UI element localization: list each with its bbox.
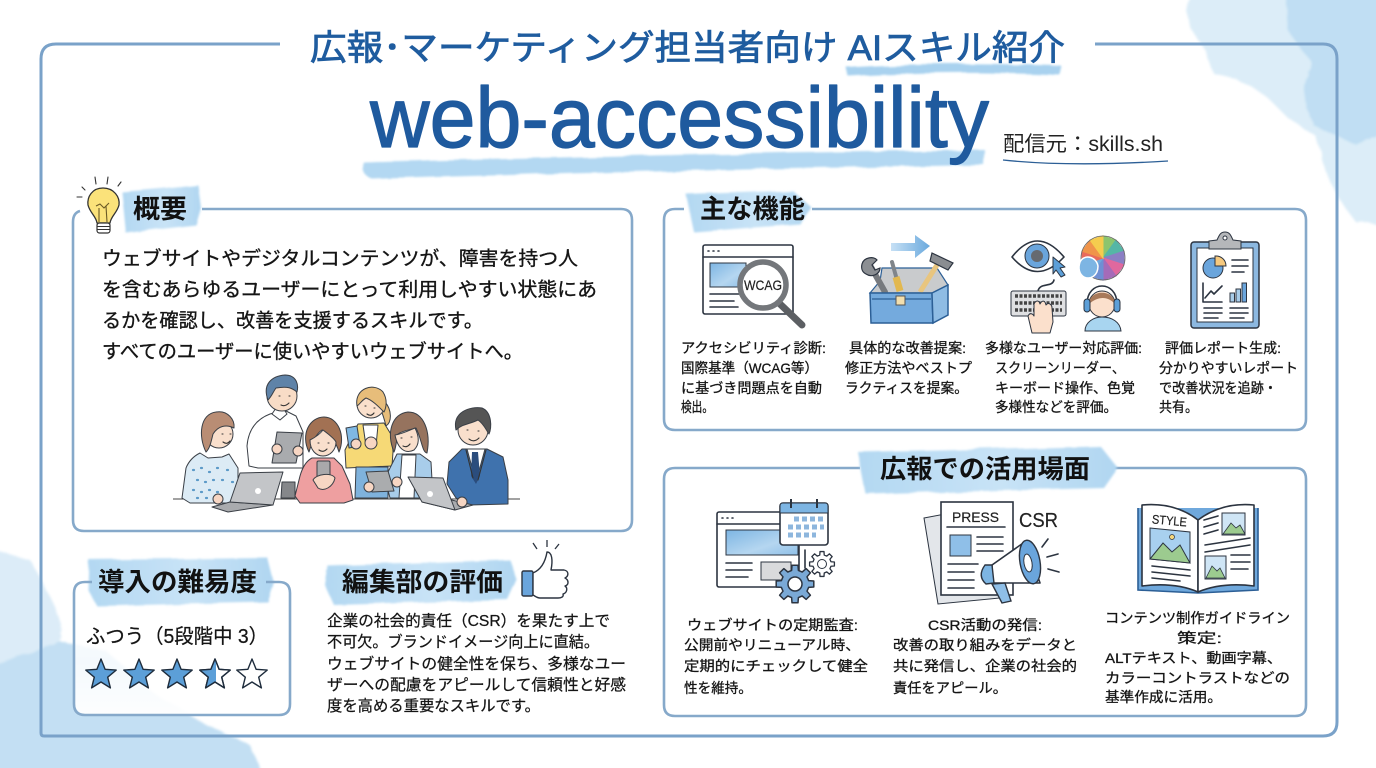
use case text: CSR communication: CSR活動の発信: — [928, 617, 1042, 633]
icon: website audit — [717, 499, 834, 603]
section: editorial review — [325, 540, 626, 715]
source label: 配信元：skills.sh — [1003, 133, 1163, 156]
icon: clipboard report — [1191, 232, 1259, 328]
eye — [1012, 241, 1064, 272]
title: subtitle — [310, 29, 1065, 76]
difficulty level: ふつう（5段階中 3） — [86, 625, 268, 648]
watercolor background: bottom left — [0, 548, 262, 768]
use case text: website audit: 定期的にチェックして健全 — [684, 658, 868, 674]
feature text: diverse user evaluation: 多様なユーザー対応評価: — [985, 340, 1142, 356]
icon: press release and megaphone: PRESS — [952, 509, 999, 525]
icon: style guide book — [1138, 505, 1258, 593]
feature text: diverse user evaluation: キーボード操作、色覚 — [995, 380, 1135, 396]
feature text: diverse user evaluation: スクリーンリーダー、 — [995, 360, 1125, 376]
review text: 企業の社会的責任（CSR）を果たす上で — [327, 612, 610, 630]
heading chip — [858, 446, 1118, 494]
feature text: report generation — [1159, 340, 1298, 415]
use case text: website audit — [684, 617, 868, 696]
review text: ウェブサイトの健全性を保ち、多様なユー — [327, 654, 626, 673]
heading chip — [122, 185, 201, 233]
use case text: content guidelines — [1105, 610, 1290, 705]
title: skill name — [363, 71, 989, 179]
heading: 概要 — [133, 194, 187, 224]
feature text: diverse user evaluation: 多様性などを評価。 — [995, 399, 1117, 415]
use case text: CSR communication: 改善の取り組みをデータと — [893, 637, 1077, 653]
icon: style guide book: STYLE — [1151, 512, 1187, 529]
heading: 主な機能 — [700, 194, 805, 224]
icon: toolbox — [862, 235, 953, 323]
overview text — [102, 247, 597, 363]
use case text: content guidelines: コンテンツ制作ガイドライン — [1105, 610, 1290, 626]
use case text: CSR communication — [893, 617, 1077, 696]
heading: 編集部の評価 — [342, 567, 503, 597]
icon: WCAG magnifier: WCAG — [744, 277, 782, 293]
overview text: ウェブサイトやデジタルコンテンツが、障害を持つ人 — [102, 247, 578, 270]
icon: press release and megaphone — [924, 502, 1059, 604]
feature text: accessibility diagnosis: 検出。 — [681, 399, 713, 415]
heading chip — [686, 190, 812, 232]
use case text: content guidelines: 策定: — [1177, 630, 1222, 646]
overview text: るかを確認し、改善を支援するスキルです。 — [102, 310, 483, 332]
review text: 不可欠。ブランドイメージ向上に直結。 — [327, 632, 599, 651]
use case text: CSR communication: 共に発信し、企業の社会的 — [893, 658, 1077, 674]
heading: 導入の難易度 — [98, 567, 257, 597]
feature text: report generation: 評価レポート生成: — [1165, 340, 1281, 356]
skill name text: web-accessibility — [369, 71, 989, 166]
man standing — [247, 375, 303, 498]
feature text: accessibility diagnosis: に基づき問題点を自動 — [681, 380, 822, 396]
watercolor background: top right — [1190, 0, 1376, 226]
use case text: content guidelines: カラーコントラストなどの — [1105, 670, 1290, 686]
woman in polka dot sweater — [182, 412, 238, 504]
laptop right — [408, 477, 473, 510]
icon: thumbs up — [522, 540, 568, 598]
review text — [327, 612, 626, 715]
woman in yellow — [345, 387, 393, 498]
icon: light bulb — [77, 177, 121, 233]
feature text: accessibility diagnosis — [681, 340, 826, 415]
heading: 広報での活用場面 — [880, 454, 1090, 484]
feature text: report generation: で改善状況を追跡・ — [1159, 380, 1277, 396]
use case text: content guidelines: 基準作成に活用。 — [1105, 689, 1222, 705]
feature text: concrete suggestions — [845, 340, 972, 396]
color wheel — [1081, 236, 1125, 280]
illustration: team with devices — [173, 375, 520, 512]
star rating — [86, 659, 267, 688]
icon: WCAG magnifier — [703, 245, 802, 325]
icon: press release and megaphone: CSR — [1019, 510, 1058, 532]
feature text: concrete suggestions: 具体的な改善提案: — [849, 340, 966, 356]
panel: difficulty — [74, 558, 290, 715]
feature text: report generation: 共有。 — [1159, 399, 1198, 415]
man in suit — [447, 408, 508, 505]
panel: PR use cases — [664, 446, 1306, 716]
review text: 度を高める重要なスキルです。 — [327, 697, 540, 715]
arrow — [891, 235, 930, 258]
title brush stroke — [363, 150, 985, 179]
support person — [1085, 317, 1121, 331]
woman in pink — [295, 417, 353, 503]
feature text: diverse user evaluation — [985, 340, 1142, 415]
overview text: を含むあらゆるユーザーにとって利用しやすい状態にあ — [102, 279, 597, 301]
keyboard — [1038, 280, 1054, 291]
panel: main features — [664, 190, 1306, 430]
feature text: accessibility diagnosis: 国際基準（WCAG等） — [681, 360, 818, 376]
use case text: website audit: ウェブサイトの定期監査: — [687, 617, 858, 633]
feature text: accessibility diagnosis: アクセシビリティ診断: — [681, 340, 826, 356]
laptop left — [212, 472, 283, 512]
use case text: content guidelines: ALTテキスト、動画字幕、 — [1105, 650, 1282, 666]
overview text: すべてのユーザーに使いやすいウェブサイトへ。 — [102, 340, 523, 363]
subtitle text: 広報･マーケティング担当者向け AIスキル紹介 — [310, 29, 1065, 68]
use case text: CSR communication: 責任をアピール。 — [893, 680, 1007, 696]
review text: ザーへの配慮をアピールして信頼性と好感 — [327, 676, 626, 694]
panel: overview — [73, 177, 632, 531]
icon: eye, color wheel, keyboard, support user — [1011, 236, 1125, 333]
use case text: website audit: 公開前やリニューアル時、 — [684, 637, 860, 653]
feature text: concrete suggestions: 修正方法やベストプ — [845, 360, 972, 376]
use case text: website audit: 性を維持。 — [684, 680, 752, 696]
feature text: report generation: 分かりやすいレポート — [1159, 360, 1298, 376]
feature text: concrete suggestions: ラクティスを提案。 — [845, 380, 968, 396]
title underline swash — [846, 64, 1062, 76]
woman in blue jacket — [364, 412, 433, 498]
